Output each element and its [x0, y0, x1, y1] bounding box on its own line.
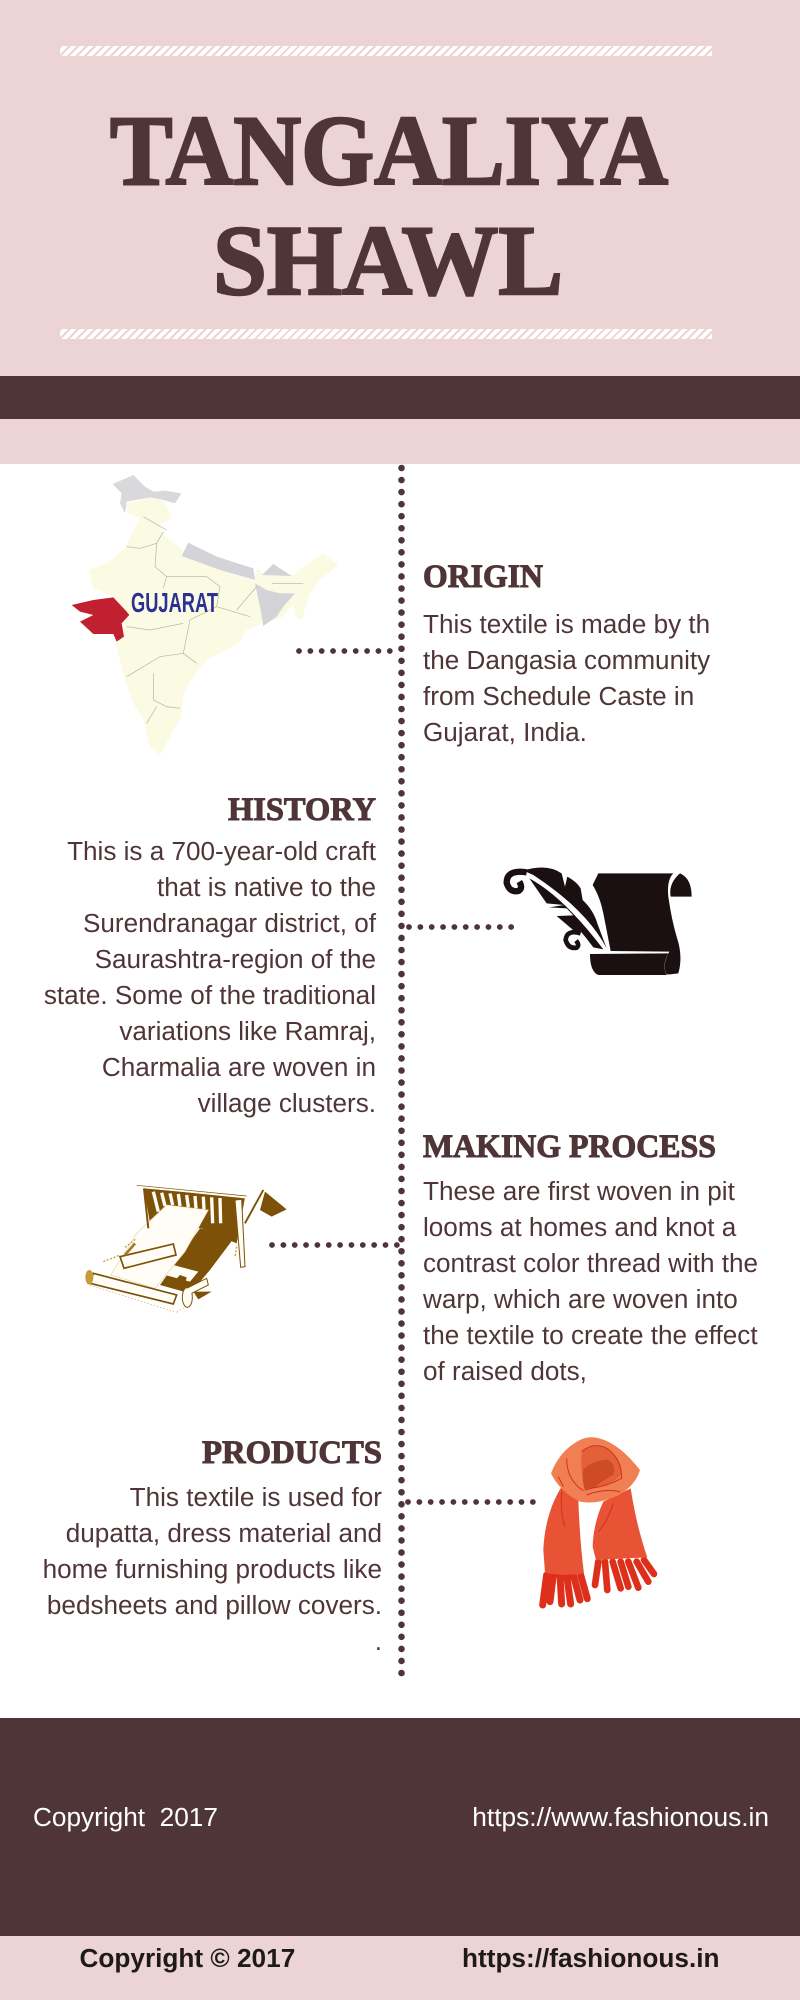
- title: TANGALIYA: [110, 95, 668, 206]
- text: making process: [423, 1176, 758, 1386]
- text: making process: the textile to create the effect: [423, 1320, 758, 1350]
- footer panel: [0, 1718, 800, 1936]
- footer url: https://www.fashionous.in: [472, 1802, 769, 1832]
- text: making process: warp, which are woven into: [423, 1284, 738, 1314]
- text: products: [43, 1482, 382, 1656]
- text: making process: These are first woven in pit: [423, 1176, 735, 1206]
- text: history: that is native to the: [157, 872, 376, 902]
- header panel: [0, 0, 800, 464]
- text: origin: This textile is made by th: [423, 609, 710, 639]
- bottom copyright: Copyright © 2017: [80, 1943, 295, 1973]
- icon: India map with Gujarat highlighted: GUJARAT: [131, 587, 218, 618]
- text: products: bedsheets and pillow covers.: [47, 1590, 382, 1620]
- text: origin: Gujarat, India.: [423, 717, 587, 747]
- top stripe: [60, 46, 712, 56]
- title: SHAWL: [213, 205, 563, 316]
- text: history: This is a 700-year-old craft: [67, 836, 376, 866]
- text: making process: contrast color thread with the: [423, 1248, 758, 1278]
- text: history: [44, 836, 376, 1118]
- text: history: village clusters.: [198, 1088, 376, 1118]
- text: history: variations like Ramraj,: [119, 1016, 376, 1046]
- text: origin: [423, 609, 710, 747]
- heading: making process: MAKING PROCESS: [423, 1129, 716, 1165]
- text: making process: of raised dots,: [423, 1356, 587, 1386]
- title: [110, 95, 668, 316]
- text: history: Saurashtra-region of the: [95, 944, 376, 974]
- text: products: dupatta, dress material and: [66, 1518, 382, 1548]
- heading: history: HISTORY: [228, 792, 376, 828]
- text: history: state. Some of the traditional: [44, 980, 376, 1010]
- text: history: Charmalia are woven in: [102, 1052, 376, 1082]
- heading: origin: ORIGIN: [423, 559, 543, 595]
- text: products: .: [375, 1626, 382, 1656]
- dark band: [0, 376, 800, 419]
- text: origin: from Schedule Caste in: [423, 681, 694, 711]
- bottom strip: [0, 1936, 800, 2000]
- text: origin: the Dangasia community: [423, 645, 710, 675]
- footer copyright: Copyright 2017: [33, 1802, 218, 1832]
- text: making process: looms at homes and knot a: [423, 1212, 736, 1242]
- heading: products: PRODUCTS: [202, 1435, 382, 1471]
- text: history: Surendranagar district, of: [83, 908, 376, 938]
- bottom stripe: [60, 329, 712, 339]
- text: products: This textile is used for: [130, 1482, 382, 1512]
- bottom url: https://fashionous.in: [462, 1943, 720, 1973]
- text: products: home furnishing products like: [43, 1554, 382, 1584]
